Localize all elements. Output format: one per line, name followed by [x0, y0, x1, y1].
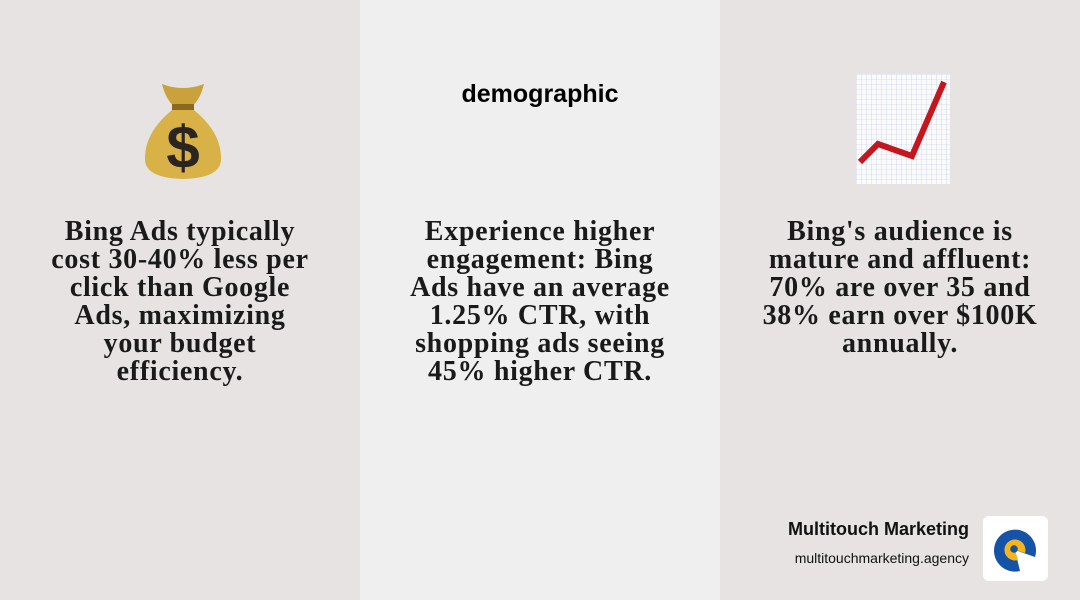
brand name: Multitouch Marketing: [788, 519, 969, 539]
text: cost: your budget: [104, 328, 256, 359]
text: cost: [51, 216, 309, 387]
text: engagement: shopping ads seeing: [415, 328, 665, 359]
text: cost: Ads, maximizing: [74, 300, 286, 331]
text: audience: mature and affluent:: [769, 244, 1031, 275]
text: engagement: Experience higher: [425, 216, 655, 247]
panel: cost: [0, 0, 360, 600]
icon: chart: [856, 74, 950, 184]
text: engagement: [410, 216, 670, 387]
text: engagement: engagement: Bing: [427, 244, 653, 275]
heading: demographic: demographic: [462, 80, 618, 108]
text: audience: 70% are over 35 and: [769, 272, 1031, 303]
text: audience: Bing's audience is: [787, 216, 1013, 247]
text: cost: Bing Ads typically: [65, 216, 295, 247]
text: cost: cost 30-40% less per: [51, 244, 309, 275]
icon: money bag: $: [166, 114, 200, 181]
panel: audience: [720, 0, 1080, 600]
icon: money bag: [144, 84, 222, 181]
text: cost: efficiency.: [117, 356, 243, 387]
text: engagement: Ads have an average: [410, 272, 670, 303]
text: engagement: 45% higher CTR.: [428, 356, 652, 387]
panel: engagement: [360, 0, 720, 600]
text: audience: annually.: [842, 328, 958, 359]
text: audience: [763, 216, 1037, 359]
text: cost: click than Google: [70, 272, 290, 303]
logo: [983, 516, 1048, 581]
text: engagement: 1.25% CTR, with: [430, 300, 650, 331]
brand url: multitouchmarketing.agency: [795, 550, 969, 566]
text: audience: 38% earn over $100K: [763, 300, 1037, 331]
